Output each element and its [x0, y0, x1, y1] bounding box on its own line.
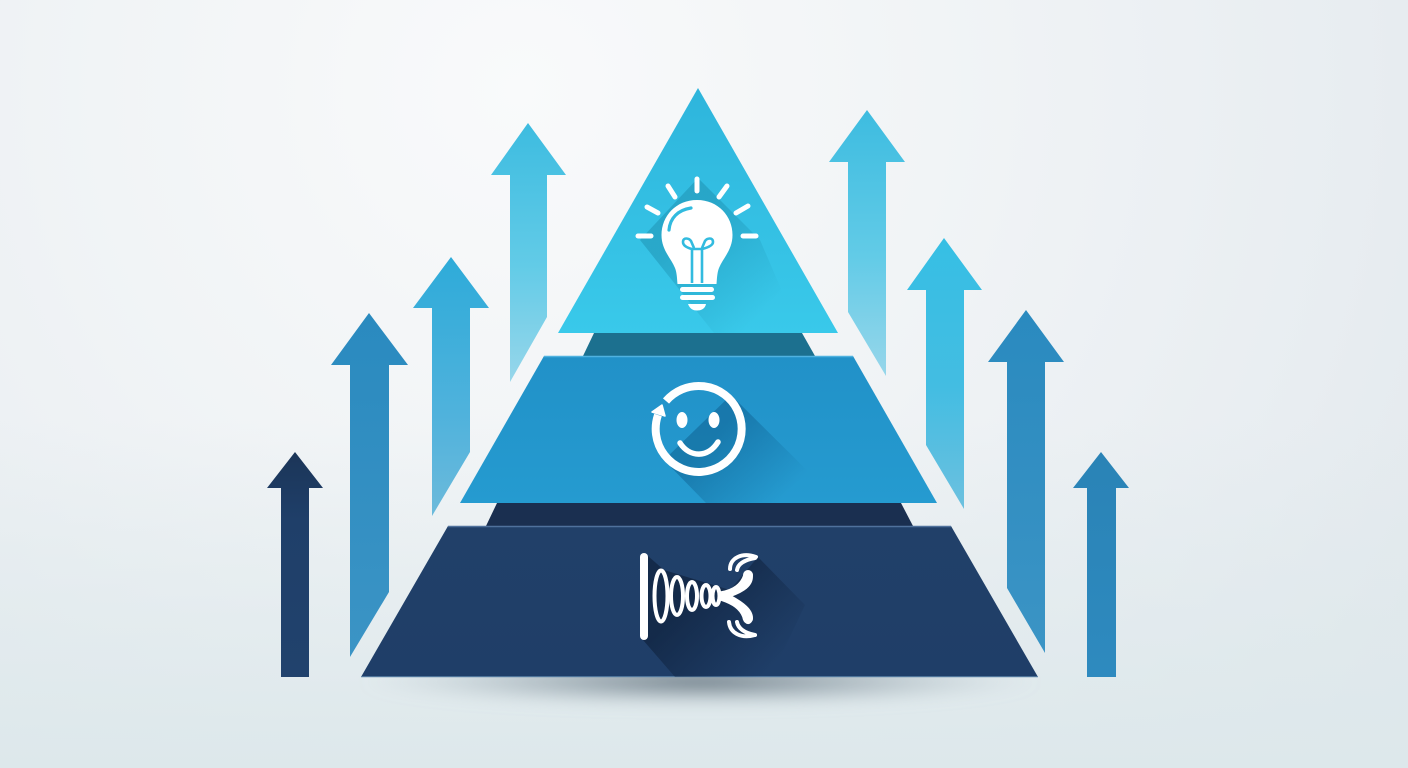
connector band: upper	[583, 333, 815, 356]
arrow: right 1 light cyan	[829, 110, 905, 376]
arrow: left 4 light cyan	[491, 123, 566, 382]
arrow: left 3 sky blue	[413, 257, 489, 516]
pyramid tier: top triangle with lightbulb	[558, 88, 838, 333]
icon: spring and fork	[640, 553, 756, 640]
arrow: left 2 mid blue	[331, 313, 408, 657]
pyramid tier: middle with smiley	[460, 356, 937, 503]
connector band: lower	[486, 503, 913, 526]
icon: lightbulb	[638, 179, 756, 310]
arrow: right 4 blue	[1073, 452, 1129, 677]
arrow: left 1 navy	[267, 452, 323, 677]
arrow: right 3 mid blue	[988, 310, 1064, 653]
pyramid tier: bottom with spring	[361, 526, 1038, 677]
icon: refresh smiley	[652, 386, 742, 472]
ground shadow	[360, 656, 1040, 708]
icon shadow: spring	[643, 556, 805, 677]
icon shadow: lightbulb	[640, 180, 768, 322]
arrow: right 2 cyan	[907, 238, 982, 509]
icon shadow: smiley	[670, 398, 792, 503]
